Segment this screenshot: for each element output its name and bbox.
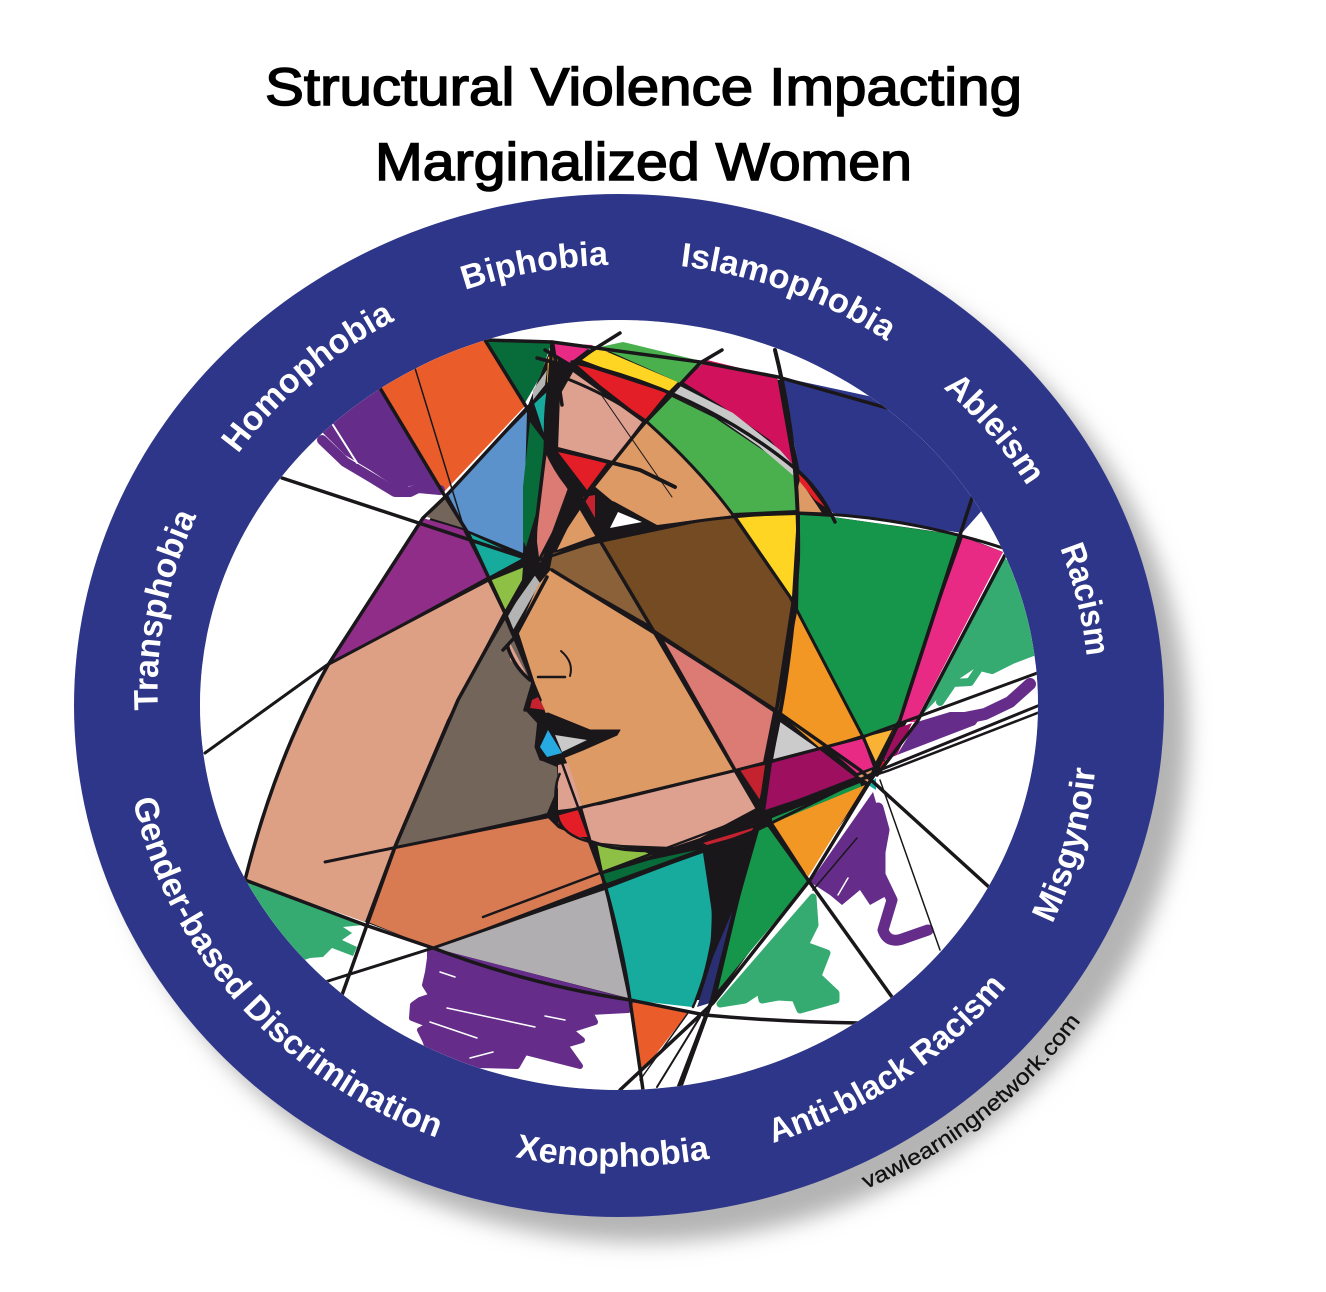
black structural lines — [205, 333, 1040, 1090]
scribble: sea green, lower left — [246, 880, 361, 960]
colour shards, bottom — [607, 785, 865, 1007]
colour shards, upper left — [330, 338, 568, 663]
label: Ableism: Ableism — [944, 376, 1040, 484]
scribble: dark purple, right — [810, 684, 1030, 940]
website credit: vawlearningnetwork.com — [861, 1016, 1080, 1188]
white inner disc — [200, 320, 1038, 1090]
scribble: dark purple, top left — [310, 388, 443, 493]
face: eye, nose and lips — [503, 495, 657, 842]
lower closed eye — [530, 697, 620, 762]
scribble: dark purple, bottom left — [412, 950, 630, 1066]
label: Misgynoir: Misgynoir — [1032, 768, 1095, 922]
label: Islamophobia: Islamophobia — [682, 243, 892, 341]
title: Structural Violence Impacting — [265, 58, 1022, 117]
artwork: stained-glass face — [205, 333, 1045, 1090]
navy outer ring — [74, 194, 1164, 1217]
label: Biphobia: Biphobia — [460, 241, 608, 290]
title — [265, 58, 1022, 192]
colour shards, face and forehead — [517, 342, 1000, 883]
label: Racism: Racism — [1060, 542, 1104, 654]
dark underlay between shards — [356, 349, 1003, 1000]
label: Xenophobia: Xenophobia — [515, 1134, 710, 1174]
scribble: sea green, upper right — [924, 558, 1034, 713]
title: Marginalized Women — [375, 133, 912, 192]
colour shards, right side — [703, 515, 1003, 845]
label: Gender-based Discrimination: Gender-based Discrimination — [135, 798, 440, 1137]
upper eye — [610, 500, 657, 528]
label: Transphobia: Transphobia — [134, 512, 196, 710]
colour shards, large lower left — [245, 582, 628, 998]
label: Homophobia: Homophobia — [220, 308, 395, 452]
scribble: sea green, bottom right — [720, 897, 836, 1010]
label: Anti-black Racism: Anti-black Racism — [774, 978, 1006, 1143]
wheel drop shadow — [98, 220, 1188, 1242]
